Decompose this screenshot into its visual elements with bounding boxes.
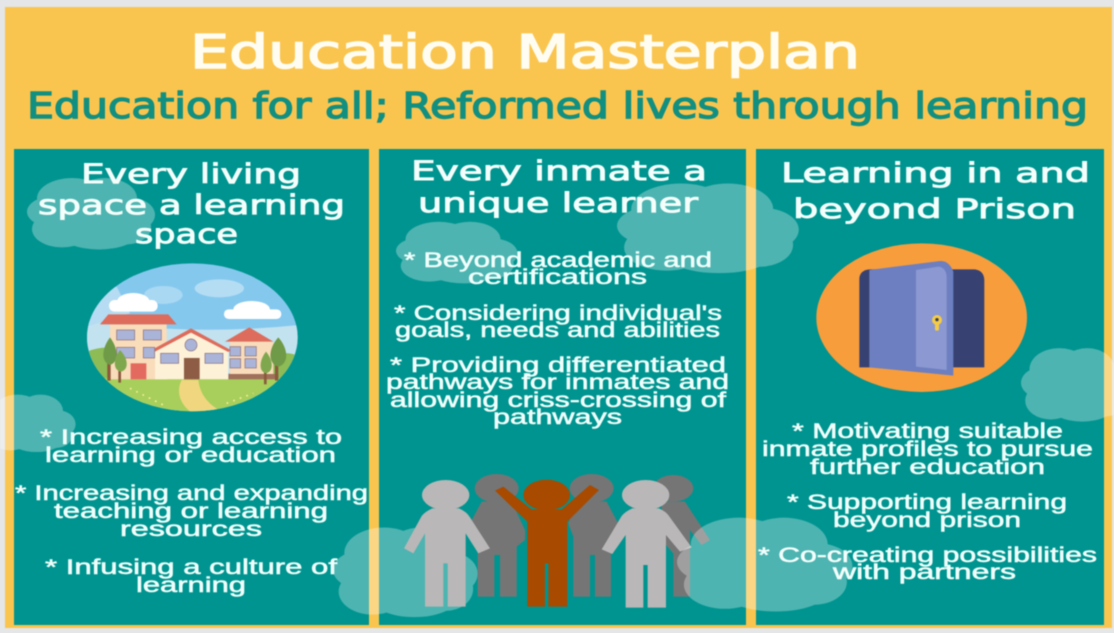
bullet list: further education (810, 456, 1045, 479)
figure: back left (470, 474, 525, 597)
cloud: bottom right (677, 518, 852, 611)
bullet list: beyond prison (833, 509, 1021, 532)
bullet list: * Increasing access to (40, 426, 342, 449)
bullet list: goals, needs and abilities (395, 319, 720, 342)
heading (411, 156, 707, 219)
figure: front right (602, 480, 692, 608)
bullet list (15, 426, 368, 597)
heading: Every living (81, 159, 301, 190)
heading (781, 158, 1090, 225)
bullet list: teaching or learning (54, 500, 328, 523)
cloud: top right (617, 184, 799, 273)
bullet list: * Providing differentiated (390, 354, 726, 377)
subtitle: Education for all; Reformed lives through learning (27, 86, 1088, 127)
panel: learning in and beyond prison (756, 149, 1114, 625)
heading: beyond Prison (793, 194, 1076, 225)
cloud: left edge (0, 395, 76, 452)
figure: back right (653, 475, 710, 597)
bullet list (386, 249, 729, 429)
bullet list: * Motivating suitable (792, 420, 1063, 443)
bullet list: certifications (468, 266, 647, 289)
figure: front left (404, 480, 490, 607)
cloud: top left (27, 178, 155, 249)
heading: Learning in and (781, 158, 1090, 189)
bullet list: * Infusing a culture of (45, 556, 337, 579)
bullet list: resources (120, 518, 262, 541)
bullet list: allowing criss-crossing of (390, 389, 726, 412)
bullet list: * Increasing and expanding (15, 482, 368, 505)
bullet list: * Supporting learning (787, 491, 1067, 514)
cloud: right edge (1021, 348, 1114, 422)
icon: open door in orange oval (816, 243, 1027, 392)
bullet list: inmate profiles to pursue (762, 438, 1093, 461)
cloud: bottom left (333, 528, 478, 617)
bullet list: * Co-creating possibilities (758, 544, 1097, 567)
panel: every living space a learning space (0, 149, 369, 625)
bullet list: learning (136, 574, 246, 597)
bullet list (758, 420, 1097, 584)
bullet list: with partners (831, 561, 1016, 584)
bullet list: * Beyond academic and (404, 249, 712, 272)
bullet list: pathways for inmates and (386, 371, 729, 394)
bullet list: learning or education (45, 444, 336, 467)
icon: group of people (404, 474, 710, 608)
panel: every inmate a unique learner (333, 149, 852, 625)
cloud: beside first bullet (396, 222, 518, 283)
bullet list: * Considering individual's (394, 302, 722, 325)
figure: centre raised arms (495, 480, 599, 607)
heading: space (135, 219, 238, 250)
figure: back centre (568, 474, 622, 597)
heading (38, 159, 345, 250)
heading: unique learner (418, 188, 699, 219)
heading: Every inmate a (411, 156, 707, 187)
title: Education Masterplan (190, 25, 860, 79)
bullet list: pathways (493, 406, 622, 429)
illustration: school building in oval (83, 260, 303, 415)
heading: space a learning (38, 190, 345, 221)
